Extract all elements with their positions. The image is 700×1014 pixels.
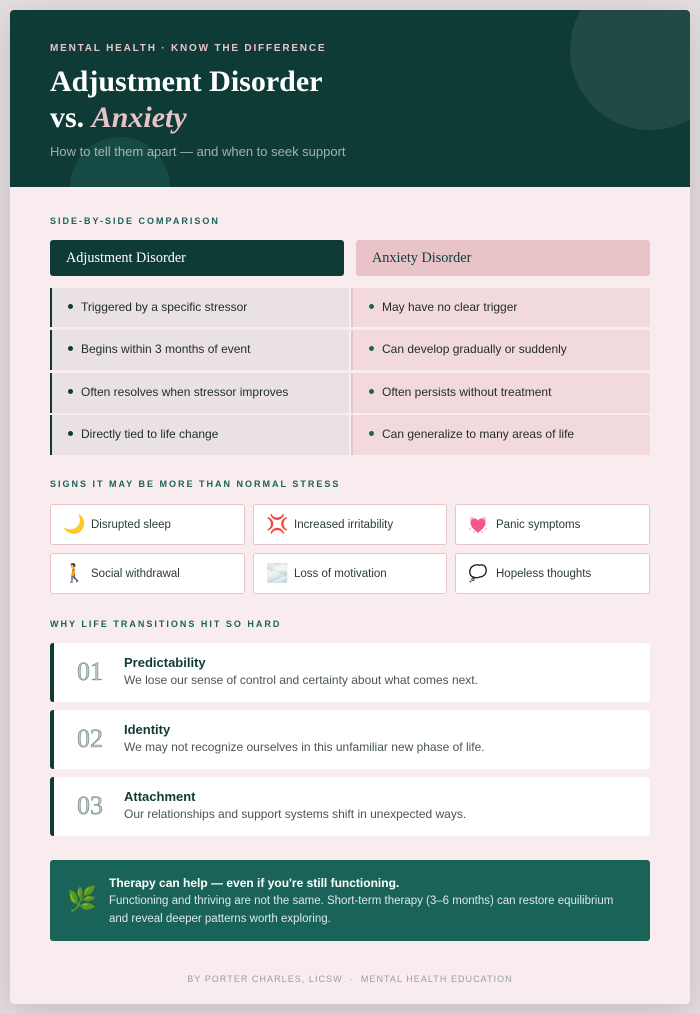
sign: social withdrawal <box>50 553 245 594</box>
column header: adjustment disorder: Adjustment Disorder <box>66 250 186 266</box>
sign: loss of motivation <box>253 553 447 594</box>
anxiety row 3 <box>351 373 650 413</box>
decorative circle bottom left <box>70 137 170 187</box>
sign: loss of motivation: Loss of motivation <box>294 568 387 580</box>
sign: increased irritability: 💢 <box>266 514 288 534</box>
column header: adjustment disorder <box>50 240 344 276</box>
anxiety row 3: Often persists without treatment <box>382 385 551 399</box>
icon: herb: 🌿 <box>67 886 97 913</box>
adjustment row 3 <box>50 373 349 413</box>
reason text: We may not recognize ourselves in this unfamiliar new phase of life. <box>124 740 485 754</box>
callout text: and reveal deeper patterns worth exploring. <box>109 913 331 925</box>
adjustment row 2: Begins within 3 months of event <box>81 342 250 356</box>
sign: disrupted sleep: 🌙 <box>63 514 85 534</box>
subtitle: How to tell them apart — and when to seek support <box>50 144 346 159</box>
sign: social withdrawal: Social withdrawal <box>91 568 180 580</box>
eyebrow text: MENTAL HEALTH · KNOW THE DIFFERENCE <box>50 43 326 54</box>
comparison rows <box>50 288 650 455</box>
adjustment row 4 <box>50 415 349 455</box>
sign: disrupted sleep: Disrupted sleep <box>91 519 171 531</box>
anxiety row 1: May have no clear trigger <box>382 300 517 314</box>
header panel <box>10 10 690 187</box>
title: Adjustment Disorder <box>50 65 322 98</box>
sign: hopeless thoughts: Hopeless thoughts <box>496 568 591 580</box>
sign: increased irritability: Increased irritability <box>294 519 393 531</box>
anxiety row 4: Can generalize to many areas of life <box>382 427 574 441</box>
adjustment row 2 <box>50 330 349 370</box>
title <box>50 65 322 134</box>
reason title: Attachment <box>124 789 196 804</box>
adjustment row 4: Directly tied to life change <box>81 427 218 441</box>
sign: panic symptoms <box>455 504 650 545</box>
heading: side-by-side comparison: SIDE-BY-SIDE COMPARISON <box>50 216 220 226</box>
title: vs. Anxiety <box>50 101 187 134</box>
number 03: 03 <box>77 791 103 820</box>
anxiety row 2: Can develop gradually or suddenly <box>382 342 567 356</box>
callout text: Functioning and thriving are not the same. Short-term therapy (3–6 months) can restore equilibrium <box>109 895 613 907</box>
reason title: Predictability <box>124 655 206 670</box>
column header: anxiety disorder <box>356 240 650 276</box>
icon: beating heart <box>469 517 487 533</box>
adjustment row 3: Often resolves when stressor improves <box>81 385 288 399</box>
reason text: Our relationships and support systems shift in unexpected ways. <box>124 807 466 821</box>
decorative circle top right <box>570 10 690 130</box>
sign: hopeless thoughts <box>455 553 650 594</box>
sign: loss of motivation: 🌫️ <box>266 563 288 583</box>
sign: panic symptoms: Panic symptoms <box>496 519 580 531</box>
icon: thought balloon <box>469 564 487 582</box>
sign: increased irritability <box>253 504 447 545</box>
anxiety row 1 <box>351 288 650 327</box>
adjustment row 1: Triggered by a specific stressor <box>81 300 247 314</box>
footer: BY PORTER CHARLES, LICSW · MENTAL HEALTH EDUCATION <box>187 974 513 984</box>
reason 01 <box>50 643 650 702</box>
reason text: We lose our sense of control and certainty about what comes next. <box>124 673 478 687</box>
heading: signs: SIGNS IT MAY BE MORE THAN NORMAL STRESS <box>50 479 340 489</box>
anxiety row 4 <box>351 415 650 455</box>
callout heading: Therapy can help — even if you're still functioning. <box>109 876 399 890</box>
column header: anxiety disorder: Anxiety Disorder <box>372 250 471 266</box>
reason title: Identity <box>124 722 170 737</box>
sign: social withdrawal: 🚶 <box>63 563 85 583</box>
reason 02 <box>50 710 650 769</box>
number 01: 01 <box>77 657 103 686</box>
reason 03 <box>50 777 650 836</box>
sign: disrupted sleep <box>50 504 245 545</box>
number 02: 02 <box>77 724 103 753</box>
anxiety row 2 <box>351 330 650 370</box>
adjustment row 1 <box>50 288 349 327</box>
heading: why transitions: WHY LIFE TRANSITIONS HIT SO HARD <box>50 619 281 629</box>
callout text <box>109 895 613 925</box>
callout: therapy <box>50 860 650 941</box>
